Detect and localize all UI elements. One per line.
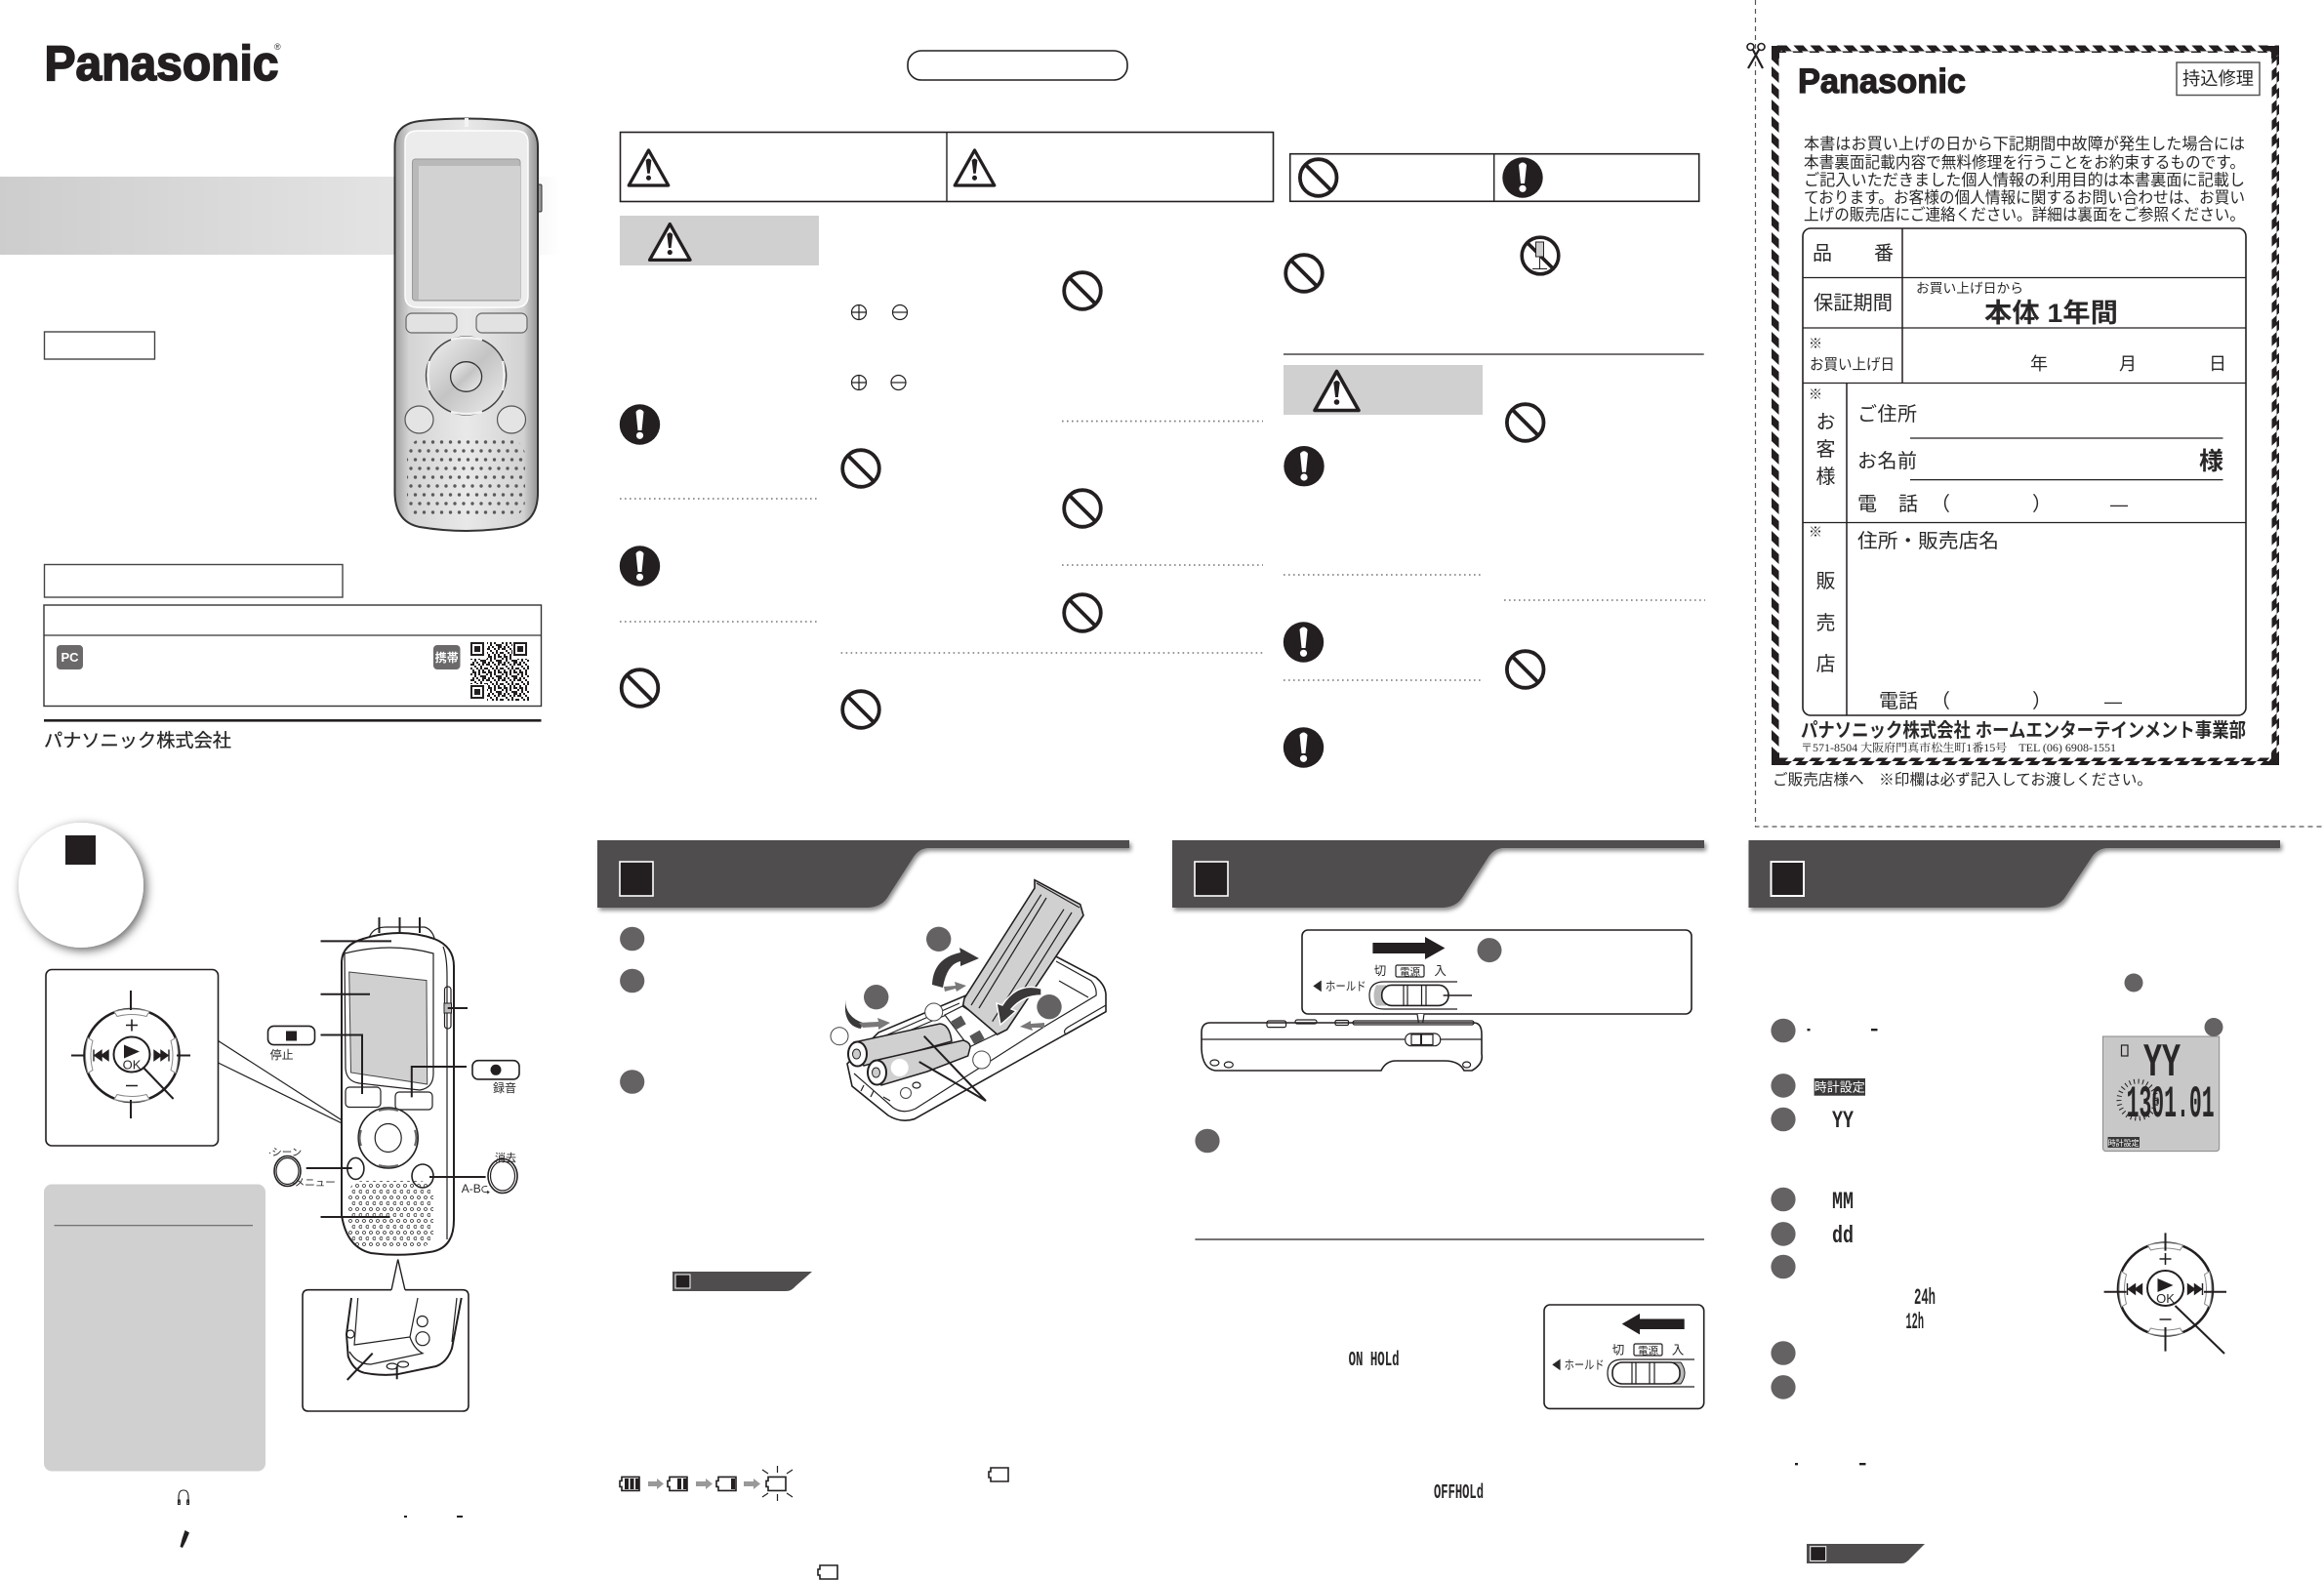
model number box: [45, 332, 154, 359]
icon: prohibited 4: [1064, 272, 1101, 309]
inset: control pad: [46, 970, 219, 1146]
icon: prohibited symbol: [1300, 159, 1337, 196]
icon: caution: [955, 150, 995, 185]
button: erase: 消去: [495, 1151, 516, 1164]
pointer lines: [919, 1036, 986, 1101]
icon: mandatory 3: [1284, 446, 1325, 486]
warranty table: ）: [2032, 493, 2052, 515]
divider: dotted 7: [1504, 599, 1705, 601]
warranty table: 住所・販売店名: [1857, 530, 1999, 552]
warranty table: （: [1931, 690, 1950, 712]
warranty table: 販: [1815, 571, 1835, 592]
panel: safety legend left: [621, 133, 1273, 201]
button: record: 録音: [493, 1081, 516, 1095]
divider: dotted: [620, 498, 820, 500]
badge: mobile: 携帯: [435, 650, 459, 665]
button: menu: ·シーン: [268, 1147, 302, 1158]
warranty table: 電話: [1879, 690, 1918, 712]
warranty table: お買い上げ日から: [1916, 281, 2023, 296]
icon: minus terminal: [892, 304, 908, 320]
carry-in repair badge: 持込修理: [2182, 68, 2254, 89]
panel: cover page: [0, 36, 560, 751]
step marker: on LCD: [2204, 1018, 2223, 1036]
warranty statement: [1804, 136, 2245, 224]
icon: mandatory symbol: [1502, 157, 1543, 198]
text: 1301.01: [2127, 1079, 2215, 1130]
warranty table: 客: [1815, 438, 1835, 461]
warranty table: ご住所: [1857, 403, 1917, 425]
icon: empty battery 2: [818, 1565, 837, 1579]
mini reference header 2: [1807, 1544, 1925, 1563]
panel: grey notes: [44, 1185, 265, 1472]
mini reference header 1: [673, 1272, 812, 1291]
warranty table: 品: [1813, 243, 1832, 264]
leader lines: [306, 917, 486, 1217]
LCD label: off hold: OFFHOLd: [1434, 1482, 1484, 1505]
callout lines to pad: [219, 1040, 355, 1129]
icon: mandatory 5: [1284, 727, 1324, 768]
divider: dotted 3: [1062, 421, 1263, 423]
warranty table: [1803, 228, 2246, 715]
warranty table: ※: [1809, 336, 1822, 351]
arrow: level down 3: [744, 1479, 760, 1489]
icon: mandatory 4: [1284, 622, 1324, 663]
arrow: level down 2: [696, 1479, 713, 1489]
polarity circles: [831, 1003, 991, 1099]
icon: warning: [629, 150, 669, 185]
heading band: caution: [1284, 365, 1483, 415]
step circle 2: [926, 927, 951, 952]
warranty statement: 本書はお買い上げの日から下記期間中故障が発生した場合には: [1804, 136, 2245, 153]
callout: power switch: 切: [1374, 964, 1386, 978]
warranty table: 番: [1874, 242, 1894, 264]
warranty table: お名前: [1857, 450, 1917, 472]
battery full: [620, 1477, 639, 1490]
carry-in repair badge: [2177, 62, 2260, 96]
divider: dotted 6: [1284, 679, 1484, 681]
warranty table: 本体 1年間: [1984, 299, 2118, 328]
badge: PC: PC: [61, 650, 79, 665]
button: stop: [267, 1026, 314, 1062]
LCD label: on hold: ON HOLd: [1349, 1350, 1400, 1372]
icon: plus terminal 2: [851, 375, 867, 390]
arrow: slide: [944, 982, 966, 992]
address line: 〒571-8504 大阪府門真市松生町1番15号 TEL (06) 6908-1551: [1801, 741, 2116, 754]
step bullets: battery: [620, 927, 644, 1094]
warranty table: ）: [2032, 690, 2052, 712]
divider: dotted 5: [1284, 574, 1484, 576]
badge: mobile: [433, 645, 461, 669]
warranty table: お: [1815, 412, 1835, 433]
panel: safety column 1 icons: [620, 404, 820, 707]
step marker: small: [2124, 974, 2143, 992]
inset: recorder bottom: [303, 1259, 469, 1411]
panel: safety column 4 icons: [1284, 237, 1705, 768]
warranty table: 日: [2209, 354, 2226, 374]
button: stop: 停止: [270, 1048, 294, 1062]
divider: hold section: [1195, 1238, 1704, 1240]
battery one bar: [716, 1477, 736, 1490]
callout: power switch: 電源: [1400, 966, 1421, 978]
small marks: [404, 1516, 463, 1518]
warranty table: 電: [1857, 494, 1877, 515]
section 3 header: [1749, 840, 2280, 908]
springs: [951, 1016, 985, 1044]
icon: mandatory: [620, 404, 660, 445]
callout: power switch: [1302, 930, 1692, 1037]
section 1 header: [597, 840, 1129, 908]
company name: パナソニック株式会社: [44, 730, 231, 751]
warranty statement: ております。お客様の個人情報に関するお問い合わせは、お買い: [1804, 189, 2245, 207]
warranty statement: 本書裏面記載内容で無料修理を行うことをお約束するものです。: [1804, 154, 2245, 172]
LCD display: [2102, 1036, 2220, 1152]
icon: scissors: [1747, 43, 1765, 68]
grey title band: [0, 177, 560, 255]
warranty table: —: [2110, 495, 2128, 514]
step circle 1: [864, 985, 888, 1009]
warranty table: （: [1931, 493, 1950, 515]
step bullets: clock: [1771, 1019, 1796, 1399]
battery cover: [963, 880, 1083, 1034]
button: erase: [462, 1151, 517, 1195]
small marks: [1795, 1029, 1878, 1465]
QR code: [470, 642, 529, 701]
icon: prohibited 6: [1064, 594, 1101, 631]
divider: dotted 2: [620, 621, 820, 623]
text: 12h: [1905, 1310, 1924, 1335]
support box: [44, 605, 541, 707]
panel: safety column 3 icons: [1062, 272, 1263, 631]
LCD label: month: MM: [1832, 1188, 1854, 1216]
logo: Panasonic small: Panasonic: [1798, 62, 1966, 101]
button: menu: -メニュー: [291, 1177, 336, 1189]
divider: dotted long: [841, 652, 1263, 654]
battery 2: [868, 1040, 970, 1085]
rule above company name: [44, 719, 541, 722]
arrow: insert curl: [845, 999, 863, 1029]
icon: prohibited 7: [1285, 255, 1323, 292]
battery 1: [848, 1024, 952, 1066]
battery level indicators: [620, 1466, 793, 1501]
warranty statement: 上げの販売店にご連絡ください。詳細は裏面をご参照ください。: [1804, 207, 2245, 224]
icon: prohibited: [622, 669, 658, 707]
illustration: battery compartment: [831, 880, 1106, 1120]
icon: prohibited 2: [842, 450, 879, 487]
dealer note: ご販売店様へ ※印欄は必ず記入してお渡しください。: [1773, 771, 2152, 789]
battery empty blinking: [762, 1466, 793, 1501]
icon: empty battery: [989, 1468, 1008, 1481]
LCD display: 時計設定: [2108, 1138, 2140, 1148]
warranty table: 話: [1898, 493, 1918, 515]
callout: hold switch: [1544, 1305, 1704, 1408]
callout: hold switch: 切: [1612, 1343, 1624, 1357]
panel: symbols legend right: [1290, 154, 1699, 201]
callout: hold switch: ◀ ホールド: [1552, 1358, 1605, 1372]
LCD display: YY: [2143, 1037, 2181, 1090]
arrow: lock: [1020, 1021, 1044, 1031]
warranty table: 様: [1815, 466, 1835, 488]
divider: dotted 4: [1062, 564, 1263, 566]
icon: prohibited 8: [1507, 404, 1544, 441]
registered mark: ®: [274, 42, 281, 52]
icon: prohibited 5: [1064, 490, 1101, 527]
warranty table: 店: [1815, 653, 1835, 675]
illustration: recorder side: [1202, 1020, 1482, 1071]
icon: minus terminal 2: [891, 375, 906, 390]
control pad: clock: [2104, 1233, 2226, 1354]
warranty table: —: [2104, 692, 2122, 711]
warranty table: お買い上げ日: [1810, 355, 1895, 373]
step circle 3: [1037, 994, 1062, 1019]
icon: headphones: [178, 1490, 189, 1505]
button: menu: [268, 1147, 336, 1189]
icon: do not disassemble: [1522, 237, 1559, 274]
warranty table: 売: [1815, 612, 1835, 634]
logo: Panasonic: Panasonic: [45, 36, 279, 91]
section 2 header: [1172, 840, 1704, 908]
icon: microphone: [180, 1530, 189, 1548]
badge: circular section tag: [19, 823, 143, 948]
warranty table: 年: [2030, 354, 2048, 374]
jagged border: [1772, 45, 2279, 765]
heading band: warning: [620, 216, 819, 265]
illustration: recorder with part labels: [306, 917, 486, 1255]
cut line: [1755, 0, 2324, 827]
callout: hold switch: 入: [1672, 1343, 1685, 1357]
company line: パナソニック株式会社 ホームエンターテインメント事業部: [1801, 719, 2246, 742]
warranty table: ※: [1809, 386, 1822, 402]
icon: plus terminal: [851, 304, 867, 320]
warranty table: 月: [2119, 354, 2137, 374]
warranty table: 保証期間: [1814, 292, 1893, 314]
icon: prohibited 3: [842, 691, 879, 728]
arrow: close cover: [997, 987, 1041, 1025]
arrow: open cover: [932, 948, 979, 988]
icon: mandatory 2: [620, 546, 660, 587]
LCD label: year: YY: [1832, 1107, 1854, 1135]
illustration: recorder front view: [394, 118, 542, 531]
badge: PC: [57, 645, 83, 669]
callout: hold switch: 電源: [1638, 1345, 1659, 1357]
warranty table: 様: [2199, 448, 2223, 475]
divider: section rule: [1284, 353, 1704, 355]
button: record: [472, 1061, 519, 1095]
notice box: [45, 564, 343, 597]
panel: warranty card: [1772, 45, 2279, 765]
compartment floor: [945, 1006, 1001, 1047]
LCD label: 24h: 24h: [1914, 1285, 1936, 1311]
icon: prohibited 9: [1507, 651, 1544, 688]
badge: clock setting: 時計設定: [1814, 1079, 1865, 1095]
arrow: insert: [859, 1018, 890, 1030]
callout: power switch: ◀ ホールド: [1313, 980, 1366, 993]
button: erase: A-B⮎: [462, 1182, 490, 1195]
panel: safety column 2 icons: [841, 304, 1263, 728]
battery two bars: [668, 1477, 687, 1490]
warranty table: ※: [1809, 524, 1822, 540]
warranty statement: ご記入いただきました個人情報の利用目的は本書裏面に記載し: [1804, 172, 2245, 189]
LCD label: day: dd: [1832, 1222, 1854, 1250]
arrow: level down: [648, 1479, 664, 1489]
pill heading: safety: [908, 51, 1127, 80]
step bullet: power: [1195, 1129, 1220, 1153]
callout: power switch: 入: [1434, 964, 1447, 978]
